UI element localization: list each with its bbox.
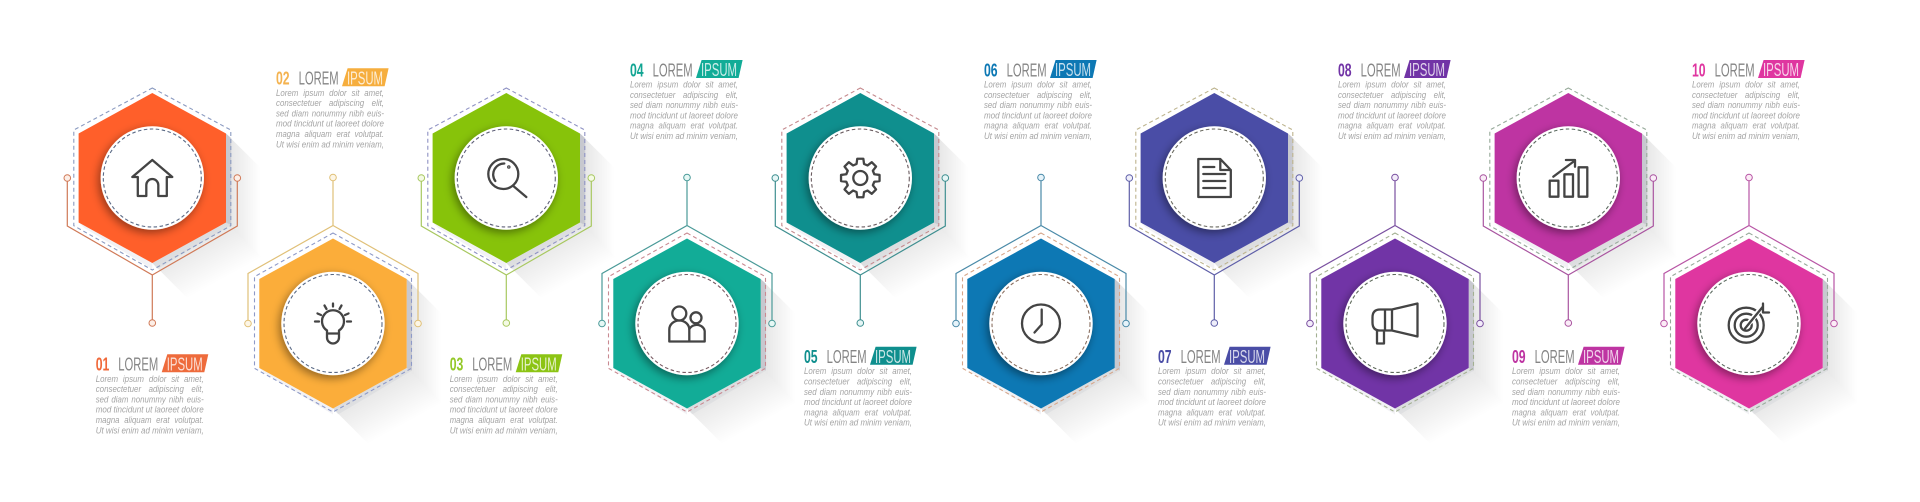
- icon: house: [132, 160, 172, 196]
- text block 10: magna aliquam erat volutpat.: [1692, 121, 1800, 131]
- text block 08: mod tincidunt ut laoreet dolore: [1338, 110, 1446, 120]
- text block 06: IPSUM: [1055, 60, 1091, 80]
- hexagon 03: [418, 88, 616, 326]
- icon: gear: [841, 159, 880, 197]
- text block 03: Ut wisi enim ad minim veniam,: [450, 425, 558, 435]
- text block 05: sed diam nonummy nibh euis-: [804, 387, 912, 397]
- text block 01: sed diam nonummy nibh euis-: [96, 394, 204, 404]
- icon: document: [1198, 159, 1231, 197]
- text block 06: Lorem ipsum dolor sit amet,: [984, 80, 1092, 90]
- text block 10: 10: [1692, 59, 1706, 80]
- text block 10: Lorem ipsum dolor sit amet,: [1692, 80, 1800, 90]
- panel: step 04: [599, 59, 797, 445]
- panel: step 01: [64, 88, 262, 435]
- hexagon 08: [1307, 174, 1505, 444]
- text block 04: consectetuer adipiscing elit,: [630, 90, 738, 100]
- text block 08: 08: [1338, 59, 1352, 80]
- panel: step 02: [245, 68, 443, 444]
- text block 04: mod tincidunt ut laoreet dolore: [630, 110, 738, 120]
- text block 04: Ut wisi enim ad minim veniam,: [630, 131, 738, 141]
- text block 07: [1158, 346, 1271, 428]
- text block 08: IPSUM: [1409, 60, 1445, 80]
- text block 07: consectetuer adipiscing elit,: [1158, 377, 1266, 387]
- text block 09: LOREM: [1535, 346, 1575, 367]
- text block 01: mod tincidunt ut laoreet dolore: [96, 405, 204, 415]
- panel: step 03: [418, 88, 616, 435]
- text block 01: IPSUM: [167, 354, 203, 374]
- text block 02: Lorem ipsum dolor sit amet,: [276, 88, 384, 98]
- panel: step 10: [1661, 59, 1859, 445]
- hexagon 10: [1661, 174, 1859, 444]
- text block 02: 02: [276, 68, 290, 89]
- text block 03: sed diam nonummy nibh euis-: [450, 394, 558, 404]
- hexagon 05: [772, 88, 970, 326]
- text block 04: magna aliquam erat volutpat.: [630, 121, 738, 131]
- text block 10: LOREM: [1715, 59, 1755, 80]
- text block 09: IPSUM: [1583, 347, 1619, 367]
- panel: step 06: [953, 59, 1151, 445]
- text block 05: Lorem ipsum dolor sit amet,: [804, 366, 912, 376]
- text block 03: LOREM: [472, 354, 512, 375]
- text block 10: mod tincidunt ut laoreet dolore: [1692, 110, 1800, 120]
- text block 09: 09: [1512, 346, 1526, 367]
- text block 01: [96, 354, 208, 435]
- text block 02: mod tincidunt ut laoreet dolore: [276, 119, 384, 129]
- text block 04: [630, 59, 743, 141]
- icon: clock: [1022, 304, 1060, 342]
- text block 05: IPSUM: [875, 347, 911, 367]
- text block 08: LOREM: [1361, 59, 1401, 80]
- text block 07: LOREM: [1181, 346, 1221, 367]
- text block 08: sed diam nonummy nibh euis-: [1338, 100, 1446, 110]
- text block 07: Lorem ipsum dolor sit amet,: [1158, 366, 1266, 376]
- panel: step 09: [1480, 88, 1678, 428]
- panel: step 08: [1307, 59, 1505, 445]
- text block 09: Ut wisi enim ad minim veniam,: [1512, 418, 1620, 428]
- text block 01: magna aliquam erat volutpat.: [96, 415, 204, 425]
- text block 05: [804, 346, 917, 428]
- text block 05: mod tincidunt ut laoreet dolore: [804, 397, 912, 407]
- hexagon 04: [599, 174, 797, 444]
- text block 08: magna aliquam erat volutpat.: [1338, 121, 1446, 131]
- text block 08: Lorem ipsum dolor sit amet,: [1338, 80, 1446, 90]
- text block 09: consectetuer adipiscing elit,: [1512, 377, 1620, 387]
- text block 02: consectetuer adipiscing elit,: [276, 98, 384, 108]
- panel: step 07: [1126, 88, 1324, 428]
- text block 10: sed diam nonummy nibh euis-: [1692, 100, 1800, 110]
- text block 05: consectetuer adipiscing elit,: [804, 377, 912, 387]
- icon: target: [1729, 304, 1769, 343]
- panel: step 05: [772, 88, 970, 428]
- text block 06: consectetuer adipiscing elit,: [984, 90, 1092, 100]
- icon: megaphone: [1372, 304, 1418, 344]
- text block 04: Lorem ipsum dolor sit amet,: [630, 80, 738, 90]
- text block 02: magna aliquam erat volutpat.: [276, 129, 384, 139]
- text block 09: mod tincidunt ut laoreet dolore: [1512, 397, 1620, 407]
- text block 06: [984, 59, 1097, 141]
- text block 01: Lorem ipsum dolor sit amet,: [96, 374, 204, 384]
- text block 01: LOREM: [118, 354, 158, 375]
- text block 05: Ut wisi enim ad minim veniam,: [804, 418, 912, 428]
- text block 04: IPSUM: [701, 60, 737, 80]
- text block 02: IPSUM: [347, 69, 383, 89]
- icon: magnifier: [488, 159, 526, 197]
- text block 06: Ut wisi enim ad minim veniam,: [984, 131, 1092, 141]
- text block 10: IPSUM: [1763, 60, 1799, 80]
- text block 10: Ut wisi enim ad minim veniam,: [1692, 131, 1800, 141]
- text block 02: [276, 68, 389, 149]
- text block 01: 01: [96, 354, 109, 375]
- text block 05: 05: [804, 346, 818, 367]
- text block 07: mod tincidunt ut laoreet dolore: [1158, 397, 1266, 407]
- text block 03: mod tincidunt ut laoreet dolore: [450, 405, 558, 415]
- text block 05: magna aliquam erat volutpat.: [804, 407, 912, 417]
- text block 08: Ut wisi enim ad minim veniam,: [1338, 131, 1446, 141]
- text block 07: sed diam nonummy nibh euis-: [1158, 387, 1266, 397]
- text block 10: [1692, 59, 1805, 141]
- text block 03: IPSUM: [521, 354, 557, 374]
- text block 07: Ut wisi enim ad minim veniam,: [1158, 418, 1266, 428]
- text block 08: consectetuer adipiscing elit,: [1338, 90, 1446, 100]
- icon: light bulb: [315, 304, 351, 344]
- text block 04: sed diam nonummy nibh euis-: [630, 100, 738, 110]
- text block 03: 03: [450, 354, 463, 375]
- text block 03: magna aliquam erat volutpat.: [450, 415, 558, 425]
- hexagon 09: [1480, 88, 1678, 326]
- text block 03: Lorem ipsum dolor sit amet,: [450, 374, 558, 384]
- text block 02: Ut wisi enim ad minim veniam,: [276, 139, 384, 149]
- icon: people: [669, 306, 705, 342]
- text block 06: mod tincidunt ut laoreet dolore: [984, 110, 1092, 120]
- text block 02: LOREM: [299, 68, 339, 89]
- text block 04: 04: [630, 59, 644, 80]
- hexagon 07: [1126, 88, 1324, 326]
- text block 08: [1338, 59, 1451, 141]
- text block 06: LOREM: [1007, 59, 1047, 80]
- text block 09: sed diam nonummy nibh euis-: [1512, 387, 1620, 397]
- text block 10: consectetuer adipiscing elit,: [1692, 90, 1800, 100]
- text block 07: IPSUM: [1229, 347, 1265, 367]
- text block 01: consectetuer adipiscing elit,: [96, 384, 204, 394]
- hexagon 02: [245, 174, 443, 444]
- text block 09: magna aliquam erat volutpat.: [1512, 407, 1620, 417]
- icon: growth chart: [1550, 160, 1587, 197]
- hexagon 01: [64, 88, 262, 326]
- text block 07: magna aliquam erat volutpat.: [1158, 407, 1266, 417]
- text block 02: sed diam nonummy nibh euis-: [276, 108, 384, 118]
- text block 01: Ut wisi enim ad minim veniam,: [96, 425, 204, 435]
- text block 03: consectetuer adipiscing elit,: [450, 384, 558, 394]
- hexagon 06: [953, 174, 1151, 444]
- text block 06: magna aliquam erat volutpat.: [984, 121, 1092, 131]
- text block 06: 06: [984, 59, 998, 80]
- text block 07: 07: [1158, 346, 1172, 367]
- text block 09: [1512, 346, 1625, 428]
- text block 03: [450, 354, 562, 435]
- text block 06: sed diam nonummy nibh euis-: [984, 100, 1092, 110]
- text block 09: Lorem ipsum dolor sit amet,: [1512, 366, 1620, 376]
- text block 05: LOREM: [827, 346, 867, 367]
- text block 04: LOREM: [653, 59, 693, 80]
